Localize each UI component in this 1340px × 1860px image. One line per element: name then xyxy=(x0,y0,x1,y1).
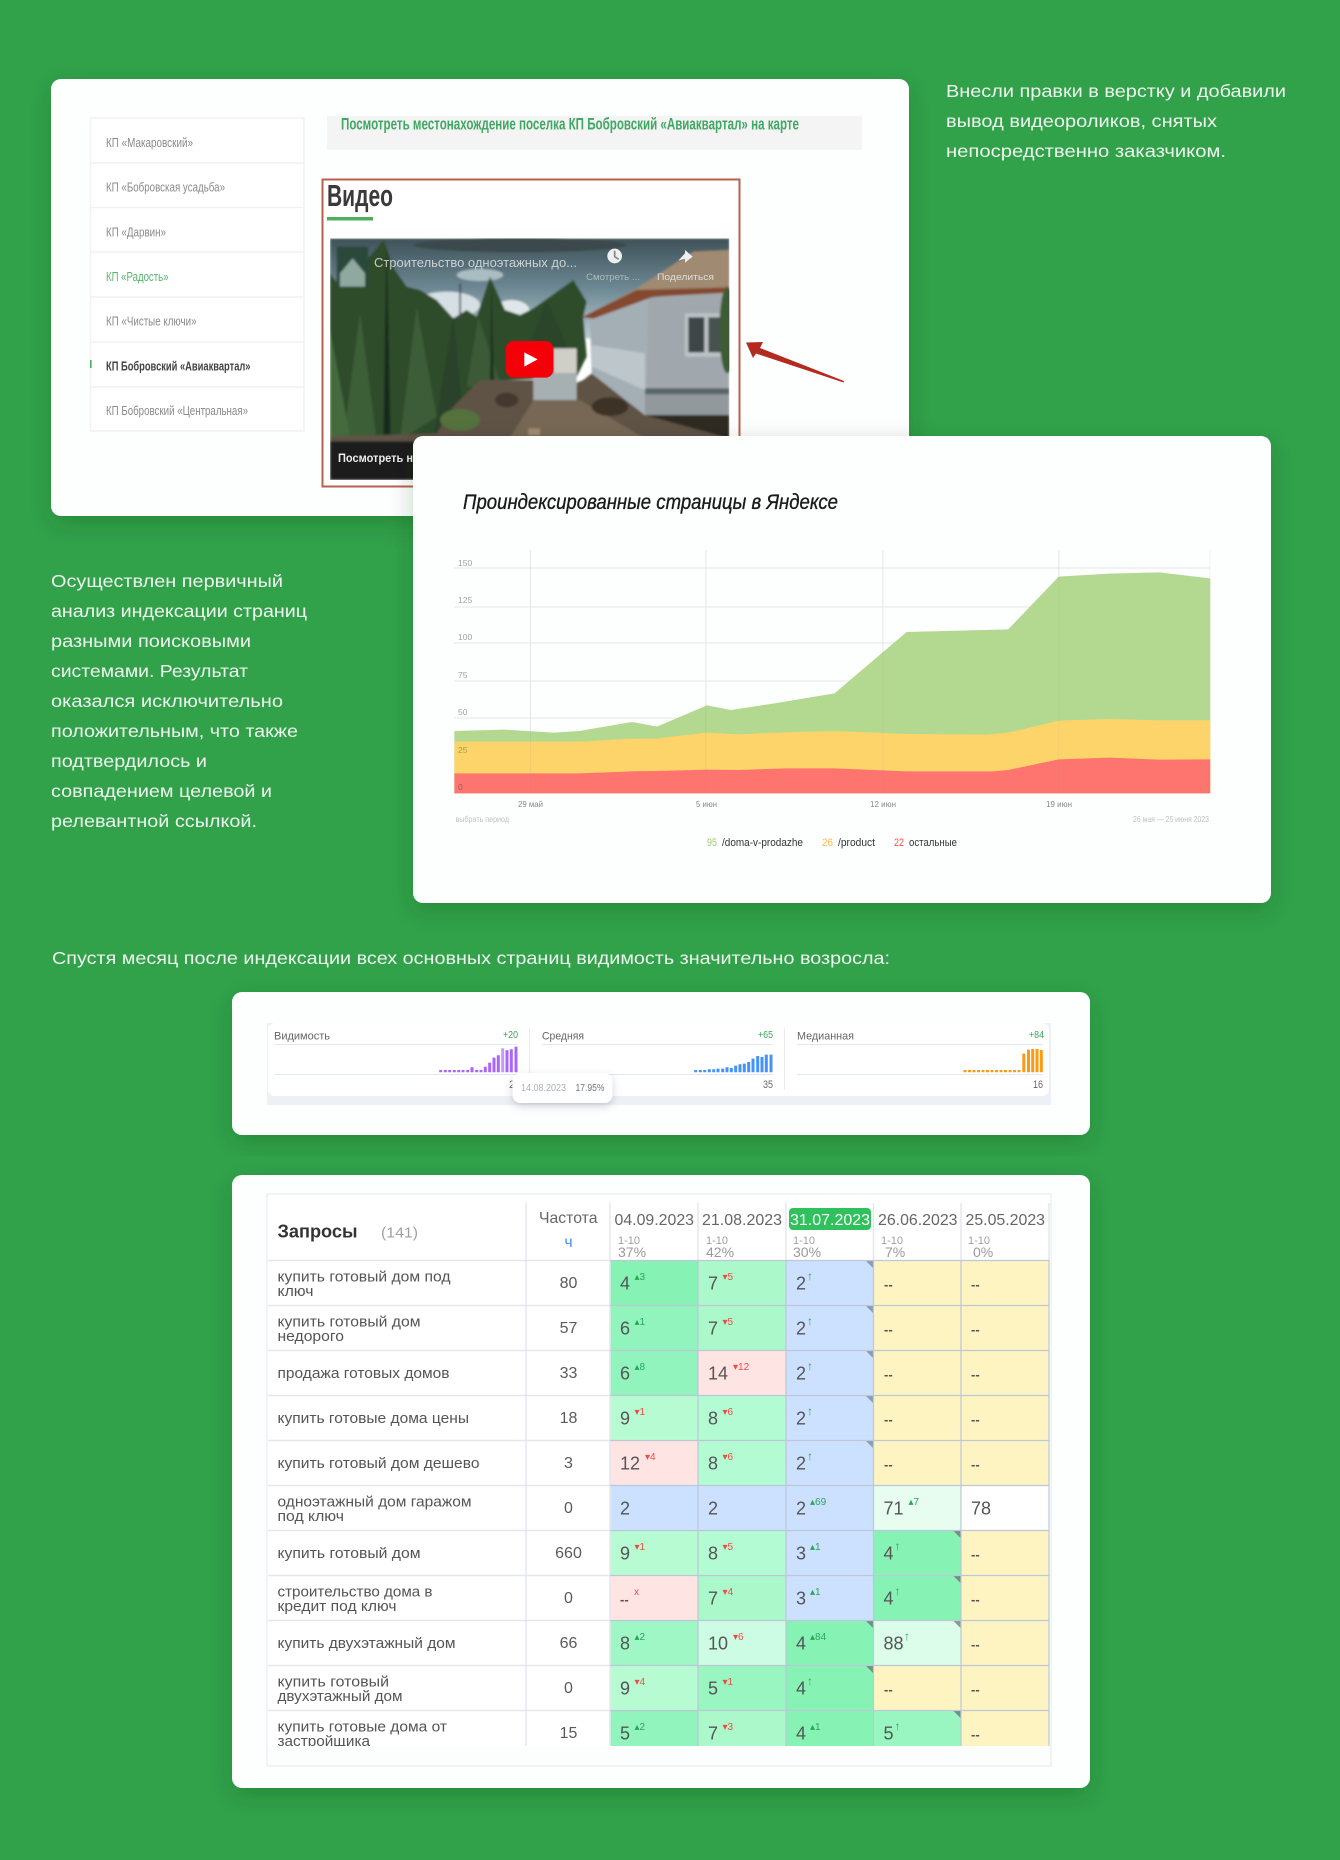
area chart: 5 июн xyxy=(696,799,717,809)
row: продажа готовых домов: продажа готовых домов xyxy=(278,1366,450,1382)
row: купить готовые дома от застройщика: 5 xyxy=(884,1724,894,1744)
text block: video changes xyxy=(946,81,1286,161)
row: купить готовые дома от застройщика: 5 xyxy=(620,1724,630,1744)
sidebar menu: КП Бобровский «Авиаквартал» xyxy=(106,360,251,374)
row: купить готовые дома цены: купить готовые дома цены xyxy=(278,1411,469,1427)
row: одноэтажный дом гаражом под ключ: 71 xyxy=(884,1498,904,1518)
row: купить готовый дом недорого: 57 xyxy=(560,1320,578,1337)
table header: (141) xyxy=(381,1224,418,1242)
metric: median: Медианная xyxy=(797,1030,854,1042)
row: купить готовый дом дешево: купить готовый дом дешево xyxy=(278,1456,480,1472)
row: купить готовый дом дешево: 8 xyxy=(708,1454,718,1474)
metric: visibility: +20 xyxy=(503,1030,518,1041)
video thumbnail: Строительство одноэтажных до... xyxy=(374,256,577,270)
share icon xyxy=(678,250,693,263)
table header: 26.06.2023 xyxy=(878,1212,958,1229)
row: купить готовый двухэтажный дом: -- xyxy=(971,1682,980,1697)
row: купить двухэтажный дом: -- xyxy=(971,1637,980,1652)
row: купить двухэтажный дом: 4 xyxy=(796,1634,806,1654)
row: продажа готовых домов: 2 xyxy=(796,1364,806,1384)
row: купить готовый дом под ключ: 80 xyxy=(560,1275,578,1292)
area chart: выбрать период xyxy=(456,814,509,824)
row: купить готовый двухэтажный дом: 9 xyxy=(620,1678,630,1698)
text block: video changes: вывод видеороликов, снятых xyxy=(946,111,1217,131)
row: продажа готовых домов: 14 xyxy=(708,1364,728,1384)
table header: 1-10 xyxy=(793,1235,815,1247)
row: купить готовый дом xyxy=(278,1530,1049,1576)
row: строительство дома в кредит под ключ: -- xyxy=(971,1592,980,1607)
chart title: Проиндексированные страницы в Яндексе xyxy=(463,491,838,514)
video thumbnail xyxy=(330,238,735,480)
row: купить готовый двухэтажный дом: 5 xyxy=(708,1678,718,1698)
area chart: 26 мая — 25 июня 2023 xyxy=(1133,814,1209,824)
text block: indexing analysis: анализ индексации страниц xyxy=(51,601,307,621)
row: купить готовые дома от застройщика: ▴1 xyxy=(810,1722,821,1733)
row: купить готовый двухэтажный дом: -- xyxy=(884,1682,893,1697)
text block: indexing analysis: релевантной ссылкой. xyxy=(51,811,257,831)
row: купить готовый дом под ключ: ▾5 xyxy=(722,1272,734,1283)
row: одноэтажный дом гаражом под ключ: 2 xyxy=(796,1498,806,1518)
row: купить готовый дом: ▴1 xyxy=(810,1542,821,1553)
area chart: 25 xyxy=(458,745,468,755)
panel: indexed pages chart xyxy=(413,436,1271,903)
row: купить двухэтажный дом: ↑ xyxy=(904,1629,910,1643)
row: купить готовый дом дешево: ↑ xyxy=(807,1449,813,1463)
map link bar xyxy=(327,116,862,150)
clock icon xyxy=(607,249,622,263)
row: продажа готовых домов: ▴8 xyxy=(634,1362,646,1373)
row: купить готовый двухэтажный дом: купить готовый xyxy=(278,1674,389,1690)
table header: 21.08.2023 xyxy=(702,1212,782,1229)
sidebar menu: КП «Макаровский» xyxy=(106,136,193,150)
chart legend xyxy=(707,837,957,849)
row: купить готовый дом недорого: ↑ xyxy=(807,1314,813,1328)
row: купить готовые дома цены: 9 xyxy=(620,1408,630,1428)
row: купить готовый дом недорого: купить готовый дом xyxy=(278,1314,420,1330)
table header: 04.09.2023 xyxy=(614,1212,694,1229)
text block: indexing analysis: Осуществлен первичный xyxy=(51,571,283,591)
row: купить двухэтажный дом: 66 xyxy=(560,1635,578,1652)
text block: indexing analysis xyxy=(51,571,307,831)
row: продажа готовых домов: -- xyxy=(884,1367,893,1382)
table header: 0% xyxy=(973,1244,993,1260)
row: купить готовый дом под ключ xyxy=(278,1260,1049,1306)
heading: video: Видео xyxy=(327,178,393,213)
row: купить двухэтажный дом: 8 xyxy=(620,1634,630,1654)
row: купить готовый дом дешево: -- xyxy=(884,1457,893,1472)
sidebar menu: КП Бобровский «Центральная» xyxy=(106,404,248,418)
sidebar menu: КП «Дарвин» xyxy=(106,226,166,240)
sidebar menu: КП «Радость» xyxy=(106,270,169,284)
row: купить готовые дома от застройщика: купить готовые дома от xyxy=(278,1720,447,1736)
row: купить готовый дом: -- xyxy=(971,1547,980,1562)
row: купить готовые дома от застройщика: ↑ xyxy=(894,1719,900,1733)
row: строительство дома в кредит под ключ: строительство дома в xyxy=(278,1584,433,1600)
row: строительство дома в кредит под ключ: 3 xyxy=(796,1588,806,1608)
text block: indexing analysis: системами. Результат xyxy=(51,661,248,681)
row: купить готовый дом недорого: недорого xyxy=(278,1329,344,1345)
row: купить готовые дома от застройщика: 4 xyxy=(796,1724,806,1744)
area chart: 75 xyxy=(458,670,468,680)
area chart: 0 xyxy=(458,782,463,792)
row: купить готовые дома от застройщика xyxy=(278,1710,1049,1750)
table header: Запросы xyxy=(278,1222,358,1242)
row: купить готовый двухэтажный дом: ▾4 xyxy=(634,1677,646,1688)
row: купить готовые дома от застройщика: ▴2 xyxy=(634,1722,646,1733)
metric: average xyxy=(542,1030,773,1091)
row: купить готовые дома цены: 8 xyxy=(708,1408,718,1428)
metric: median: 16 xyxy=(1033,1079,1043,1091)
table header xyxy=(278,1208,1045,1260)
table header: 1-10 xyxy=(968,1235,990,1247)
row: купить готовый дом дешево: ▾4 xyxy=(645,1452,656,1463)
row: купить готовый дом под ключ: ▴3 xyxy=(634,1272,646,1283)
area chart: 150 xyxy=(458,558,472,568)
video thumbnail: Поделиться xyxy=(657,272,714,283)
row: купить готовый дом под ключ: 4 xyxy=(620,1274,630,1294)
row: купить готовые дома от застройщика: ▾3 xyxy=(722,1722,734,1733)
text block: indexing analysis: подтвердилось и xyxy=(51,751,207,771)
row: строительство дома в кредит под ключ: x xyxy=(634,1587,639,1598)
row: купить готовый дом недорого: -- xyxy=(884,1322,893,1337)
row: купить готовые дома цены: -- xyxy=(971,1412,980,1427)
row: купить готовый дом: 660 xyxy=(555,1545,582,1562)
table header: 31.07.2023 xyxy=(790,1212,870,1229)
metric: visibility: 2 xyxy=(509,1079,515,1091)
row: купить готовый дом под ключ: купить готовый дом под xyxy=(278,1270,451,1286)
area chart: 125 xyxy=(458,595,472,605)
metric: visibility xyxy=(274,1030,518,1091)
row: купить готовые дома цены: ▾6 xyxy=(722,1407,734,1418)
row: купить готовый дом недорого: ▴1 xyxy=(634,1317,646,1328)
row: купить готовый дом дешево: ▾6 xyxy=(722,1452,734,1463)
tooltip xyxy=(512,1073,612,1103)
row: купить готовый дом: 4 xyxy=(884,1544,894,1564)
row: одноэтажный дом гаражом под ключ: 2 xyxy=(708,1498,718,1518)
row: продажа готовых домов xyxy=(278,1350,1049,1396)
row: купить готовый дом под ключ: ключ xyxy=(278,1284,314,1300)
row: купить готовый дом: ▾5 xyxy=(722,1542,734,1553)
text block: indexing analysis: положительным, что также xyxy=(51,721,298,741)
row: купить готовый двухэтажный дом: ▾1 xyxy=(722,1677,734,1688)
row: одноэтажный дом гаражом под ключ: одноэтажный дом гаражом xyxy=(278,1494,472,1510)
video thumbnail: Смотреть ... xyxy=(586,272,640,283)
row: купить готовые дома от застройщика: 7 xyxy=(708,1724,718,1744)
metric: median xyxy=(797,1030,1044,1091)
area chart: 29 май xyxy=(518,799,543,809)
text block: video changes: Внесли правки в верстку и добавили xyxy=(946,81,1286,101)
row: продажа готовых домов: 6 xyxy=(620,1364,630,1384)
text block: indexing analysis: разными поисковыми xyxy=(51,631,251,651)
row: купить готовый дом недорого: ▾5 xyxy=(722,1317,734,1328)
row: купить готовый дом: купить готовый дом xyxy=(278,1546,420,1562)
row: купить готовые дома от застройщика: -- xyxy=(971,1727,980,1742)
row: купить готовый дом: 8 xyxy=(708,1544,718,1564)
row: купить готовый двухэтажный дом xyxy=(278,1666,1049,1710)
metric: visibility: Видимость xyxy=(274,1030,330,1042)
table header: 25.05.2023 xyxy=(966,1212,1045,1229)
row: купить готовый двухэтажный дом: ↑ xyxy=(807,1674,813,1688)
row: купить готовый дом: 3 xyxy=(796,1544,806,1564)
row: одноэтажный дом гаражом под ключ: 2 xyxy=(620,1498,630,1518)
row: продажа готовых домов: ▾12 xyxy=(733,1362,750,1373)
chart legend: 26 xyxy=(822,837,833,849)
row: купить двухэтажный дом: ▴84 xyxy=(810,1632,827,1643)
row: купить готовый дом: ▾1 xyxy=(634,1542,646,1553)
text block: indexing analysis: совпадением целевой и xyxy=(51,781,272,801)
row: одноэтажный дом гаражом под ключ: 78 xyxy=(971,1498,991,1518)
metric: average: Средняя xyxy=(542,1030,584,1042)
table header: 42% xyxy=(706,1244,734,1260)
text block: visibility growth: Спустя месяц после индексации всех основных страниц видимость значительно возросла: xyxy=(52,948,890,968)
row: одноэтажный дом гаражом под ключ xyxy=(278,1486,1049,1530)
row: купить готовые дома цены: 18 xyxy=(560,1410,578,1427)
play button xyxy=(506,341,553,378)
row: продажа готовых домов: -- xyxy=(971,1367,980,1382)
row: купить готовый дом дешево: 2 xyxy=(796,1454,806,1474)
arrow xyxy=(746,342,844,382)
row: продажа готовых домов: 33 xyxy=(560,1365,578,1382)
row: строительство дома в кредит под ключ xyxy=(278,1576,1049,1620)
row: купить готовые дома цены: ↑ xyxy=(807,1404,813,1418)
row: строительство дома в кредит под ключ: -- xyxy=(620,1592,629,1607)
panel: rankings table xyxy=(232,1175,1090,1788)
row: строительство дома в кредит под ключ: кредит под ключ xyxy=(278,1599,396,1615)
row: купить готовый дом под ключ: ↑ xyxy=(807,1269,813,1283)
area chart xyxy=(454,550,1210,824)
row: купить готовый двухэтажный дом: двухэтажный дом xyxy=(278,1689,402,1705)
chart legend: остальные xyxy=(909,837,957,849)
chart legend: 22 xyxy=(894,837,904,849)
row: строительство дома в кредит под ключ: ▴1 xyxy=(810,1587,821,1598)
row: купить готовый дом под ключ: 7 xyxy=(708,1274,718,1294)
table header: 1-10 xyxy=(881,1235,903,1247)
table header: 1-10 xyxy=(618,1235,640,1247)
row: купить готовый дом: ↑ xyxy=(894,1539,900,1553)
row: строительство дома в кредит под ключ: 0 xyxy=(564,1590,573,1607)
sidebar menu xyxy=(90,118,304,431)
row: купить готовые дома цены: -- xyxy=(884,1412,893,1427)
sidebar menu: КП «Чистые ключи» xyxy=(106,314,197,328)
area chart: 12 июн xyxy=(870,799,896,809)
row: купить готовый дом: 9 xyxy=(620,1544,630,1564)
row: строительство дома в кредит под ключ: ↑ xyxy=(894,1584,900,1598)
row: купить готовый двухэтажный дом: 4 xyxy=(796,1678,806,1698)
row: купить готовые дома цены: 2 xyxy=(796,1408,806,1428)
row: купить готовый дом недорого: 2 xyxy=(796,1318,806,1338)
highlighted video block xyxy=(322,178,740,486)
row: купить двухэтажный дом: ▾6 xyxy=(733,1632,744,1643)
row: купить готовый дом под ключ: -- xyxy=(971,1277,980,1292)
chart legend: /product xyxy=(838,837,875,849)
area chart: 19 июн xyxy=(1046,799,1072,809)
chart legend: /doma-v-prodazhe xyxy=(722,837,803,849)
video thumbnail: Посмотреть н xyxy=(338,453,413,465)
row: купить готовый дом дешево xyxy=(278,1440,1049,1486)
row: купить готовые дома цены xyxy=(278,1396,1049,1440)
chart legend: 95 xyxy=(707,837,717,849)
row: купить готовый дом недорого: -- xyxy=(971,1322,980,1337)
row: купить готовый дом недорого: 7 xyxy=(708,1318,718,1338)
row: купить готовый дом дешево: 3 xyxy=(564,1455,573,1472)
panel: visibility metrics xyxy=(232,992,1090,1135)
tooltip: 14.08.2023 xyxy=(521,1083,566,1094)
panel: site screenshot with video xyxy=(51,79,909,516)
row: купить двухэтажный дом: ▴2 xyxy=(634,1632,646,1643)
tooltip: 17.95% xyxy=(576,1083,605,1094)
row: строительство дома в кредит под ключ: 4 xyxy=(884,1588,894,1608)
row: купить готовый дом недорого: 6 xyxy=(620,1318,630,1338)
row: купить двухэтажный дом: купить двухэтажный дом xyxy=(278,1636,456,1652)
metric: average: +65 xyxy=(758,1030,773,1041)
sidebar menu: КП «Бобровская усадьба» xyxy=(106,180,225,194)
table header: 1-10 xyxy=(706,1235,728,1247)
row: купить готовые дома от застройщика: застройщика xyxy=(278,1734,371,1750)
row: одноэтажный дом гаражом под ключ: под ключ xyxy=(278,1509,344,1525)
row: строительство дома в кредит под ключ: 7 xyxy=(708,1588,718,1608)
row: купить готовый дом под ключ: -- xyxy=(884,1277,893,1292)
row: одноэтажный дом гаражом под ключ: ▴7 xyxy=(908,1497,920,1508)
table header: ч xyxy=(564,1234,573,1251)
table header: 7% xyxy=(885,1244,905,1260)
row: одноэтажный дом гаражом под ключ: 0 xyxy=(564,1500,573,1517)
text block: video changes: непосредственно заказчиком. xyxy=(946,141,1226,161)
table header: 30% xyxy=(793,1244,821,1260)
row: купить готовый дом дешево: -- xyxy=(971,1457,980,1472)
row: купить готовый дом под ключ: 2 xyxy=(796,1274,806,1294)
row: купить готовый двухэтажный дом: 0 xyxy=(564,1680,573,1697)
heading underline xyxy=(327,217,373,220)
metric: average: 35 xyxy=(763,1079,773,1091)
row: одноэтажный дом гаражом под ключ: ▴69 xyxy=(810,1497,827,1508)
text block: indexing analysis: оказался исключительно xyxy=(51,691,283,711)
area chart: 100 xyxy=(458,632,472,642)
row: купить двухэтажный дом: 88 xyxy=(884,1634,904,1654)
row: купить двухэтажный дом: 10 xyxy=(708,1634,728,1654)
row: купить готовые дома цены: ▾1 xyxy=(634,1407,646,1418)
row: купить готовый дом недорого xyxy=(278,1306,1049,1350)
row: строительство дома в кредит под ключ: ▾4 xyxy=(722,1587,734,1598)
row: купить двухэтажный дом xyxy=(278,1620,1049,1666)
area chart: 50 xyxy=(458,707,468,717)
map link bar: Посмотреть местонахождение поселка КП Бобровский «Авиаквартал» на карте xyxy=(341,116,799,134)
row: купить готовые дома от застройщика: 15 xyxy=(560,1725,578,1742)
row: купить готовый дом дешево: 12 xyxy=(620,1454,640,1474)
metric: median: +84 xyxy=(1029,1030,1044,1041)
row: продажа готовых домов: ↑ xyxy=(807,1359,813,1373)
table header: 37% xyxy=(618,1244,646,1260)
table header: Частота xyxy=(539,1210,598,1227)
